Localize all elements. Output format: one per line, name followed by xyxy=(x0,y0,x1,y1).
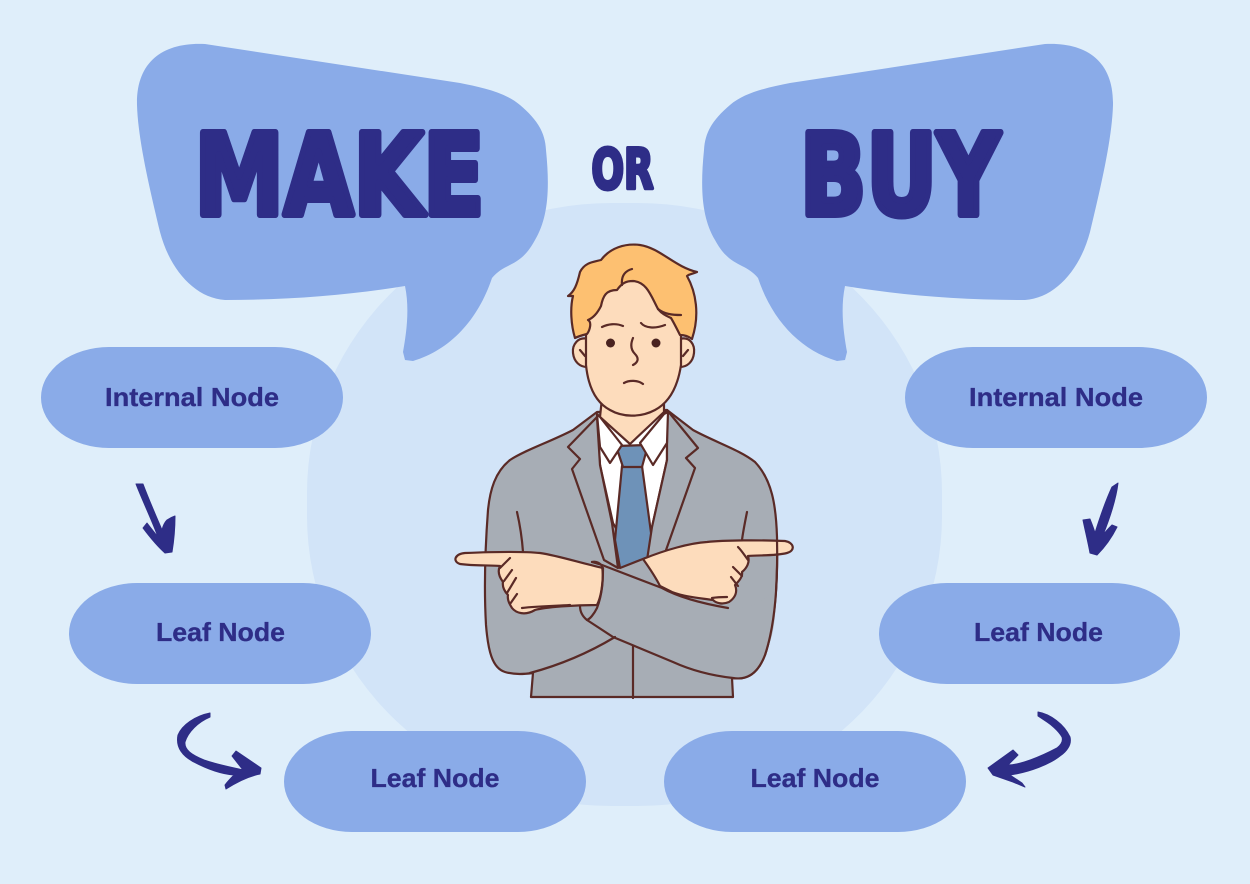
node: left leaf node: Leaf Node xyxy=(156,617,285,647)
shirt xyxy=(597,412,667,560)
arrow: curved left to bottom leaf xyxy=(178,713,261,789)
right pointing hand xyxy=(643,540,793,603)
node: bottom left leaf node xyxy=(284,731,586,832)
node: bottom right leaf node: Leaf Node xyxy=(750,763,880,793)
node: left internal node xyxy=(41,347,343,448)
hair lines xyxy=(622,269,681,315)
heading: MAKE: MAKE xyxy=(194,112,484,242)
node: left leaf node xyxy=(69,583,371,684)
tie xyxy=(615,445,652,568)
arrow: right internal to leaf xyxy=(1083,483,1118,555)
collar xyxy=(597,412,668,465)
crossing arm outline xyxy=(587,540,777,678)
eyebrows xyxy=(602,323,665,327)
node: left internal node: Internal Node xyxy=(105,382,279,412)
node: bottom right leaf node xyxy=(664,731,966,832)
jacket xyxy=(485,410,777,697)
right finger lines xyxy=(712,547,748,598)
left finger lines xyxy=(500,558,570,608)
neck xyxy=(600,398,664,444)
seams xyxy=(517,512,747,698)
speech bubble: make xyxy=(137,44,548,361)
mouth xyxy=(624,381,643,384)
background rounded circle xyxy=(307,203,942,806)
node: right internal node: Internal Node xyxy=(969,382,1143,412)
face xyxy=(586,265,681,416)
illustration: businessman xyxy=(455,245,793,698)
crossing arm fill xyxy=(580,562,776,678)
lapels xyxy=(568,410,698,568)
sleeve cuff xyxy=(580,562,603,620)
eyes xyxy=(606,338,660,348)
ears xyxy=(573,338,694,367)
arrow: left internal to leaf xyxy=(136,484,175,553)
node: right internal node xyxy=(905,347,1207,448)
hair xyxy=(568,245,697,339)
node: right leaf node: Leaf Node xyxy=(974,617,1103,647)
lower arm line xyxy=(530,637,615,673)
node: bottom left leaf node: Leaf Node xyxy=(370,763,500,793)
speech bubble: buy xyxy=(702,44,1113,361)
nose xyxy=(631,338,638,365)
left pointing hand xyxy=(455,552,603,613)
arrow: curved right to bottom leaf xyxy=(988,712,1070,787)
heading: BUY: BUY xyxy=(800,112,1001,242)
heading: OR: OR xyxy=(592,138,654,202)
node: right leaf node xyxy=(879,583,1180,684)
